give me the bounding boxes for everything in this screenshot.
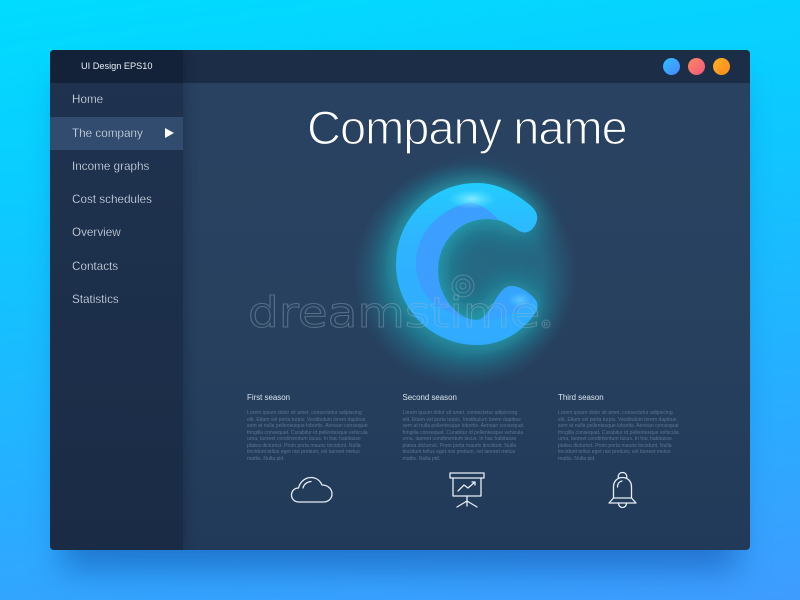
C outer body bbox=[396, 183, 538, 345]
nav item: home: Home bbox=[72, 93, 103, 106]
logo sparkles bbox=[448, 189, 532, 308]
body: third season: sem at nulla pellentesque lobortis. Aenean consequat bbox=[558, 423, 679, 429]
text block: second season bbox=[402, 393, 524, 462]
C lower tip shade bbox=[477, 286, 535, 320]
body: first season: sem at nulla pellentesque lobortis. Aenean consequat bbox=[247, 423, 368, 429]
body: first season: Lorem ipsum dolor sit amet, consectetur adipiscing bbox=[247, 410, 362, 416]
body: second season: Lorem ipsum dolor sit amet, consectetur adipiscing bbox=[402, 410, 517, 416]
body: third season: tincidunt tellus eget nisi pretium, vel laoreet metus bbox=[558, 449, 671, 455]
watermark: dreamstime bbox=[248, 288, 540, 337]
body: third season: urna, laoreet condimentum lacus. In hac habitasse bbox=[558, 436, 672, 442]
body: third season: Lorem ipsum dolor sit amet, consectetur adipiscing bbox=[558, 410, 673, 416]
body: second season: sem at nulla pellentesque lobortis. Aenean consequat bbox=[402, 423, 523, 429]
icon: bell bbox=[608, 472, 637, 508]
body: second season bbox=[402, 410, 524, 462]
C inner crescent bbox=[416, 202, 499, 320]
body: second season: tincidunt tellus eget nisi pretium, vel laoreet metus bbox=[402, 449, 515, 455]
nav item: contacts: Contacts bbox=[72, 260, 118, 273]
logo glow bbox=[396, 183, 538, 345]
heading: second season: Second season bbox=[402, 393, 457, 402]
body: first season: tincidunt tellus eget nisi pretium, vel laoreet metus bbox=[247, 449, 360, 455]
body: first season: elit. Etiam vel porta turpis. Vestibulum lorem dapibus bbox=[247, 416, 365, 422]
body: first season: fringilla consequat. Curabitur id pellentesque vehicula bbox=[247, 430, 368, 436]
window dot: blue bbox=[663, 58, 680, 75]
body: second season: fringilla consequat. Curabitur id pellentesque vehicula bbox=[402, 430, 523, 436]
body: first season bbox=[247, 410, 368, 462]
watermark bbox=[248, 275, 550, 337]
heading: first season: First season bbox=[247, 393, 290, 402]
nav item: statistics: Statistics bbox=[72, 293, 119, 306]
sidebar brand label: UI Design EPS10 bbox=[81, 61, 152, 71]
window dot: pink bbox=[688, 58, 705, 75]
panel: sidebar bbox=[50, 50, 183, 550]
heading: third season: Third season bbox=[558, 393, 604, 402]
top header bar bbox=[183, 50, 750, 83]
panel: application window bbox=[50, 50, 750, 550]
body: third season: mattis. Nulla pid. bbox=[558, 456, 596, 462]
window dot: orange bbox=[713, 58, 730, 75]
text block: first season bbox=[247, 393, 368, 462]
icon: cloud bbox=[290, 476, 333, 503]
title: Company name bbox=[307, 101, 627, 154]
body: third season bbox=[558, 410, 679, 462]
text block: third season bbox=[558, 393, 679, 462]
body: third season: fringilla consequat. Curabitur id pellentesque vehicula bbox=[558, 430, 679, 436]
body: first season: platea dictumst. Proin porta mauris tincidunt. Nulla bbox=[247, 442, 361, 448]
icon: active arrow bbox=[165, 128, 174, 138]
icon: presentation board bbox=[449, 472, 485, 508]
body: second season: urna, laoreet condimentum lacus. In hac habitasse bbox=[402, 436, 516, 442]
body: second season: mattis. Nulla pid. bbox=[402, 456, 440, 462]
body: third season: platea dictumst. Proin porta mauris tincidunt. Nulla bbox=[558, 442, 672, 448]
nav item: the company: The company bbox=[72, 127, 143, 140]
body: second season: elit. Etiam vel porta turpis. Vestibulum lorem dapibus bbox=[402, 416, 521, 422]
nav item: income graphs: Income graphs bbox=[72, 160, 149, 173]
body: first season: mattis. Nulla pid. bbox=[247, 456, 285, 462]
active row highlight bbox=[50, 117, 183, 150]
nav item: cost schedules: Cost schedules bbox=[72, 193, 152, 206]
body: first season: urna, laoreet condimentum lacus. In hac habitasse bbox=[247, 436, 361, 442]
panel shadow bbox=[62, 80, 738, 570]
sidebar brand label bbox=[50, 50, 183, 83]
body: third season: elit. Etiam vel porta turpis. Vestibulum lorem dapibus bbox=[558, 416, 676, 422]
logo halo bbox=[353, 163, 577, 387]
watermark: R bbox=[544, 322, 548, 328]
body: second season: platea dictumst. Proin porta mauris tincidunt. Nulla bbox=[402, 442, 516, 448]
nav item: overview: Overview bbox=[72, 226, 121, 239]
